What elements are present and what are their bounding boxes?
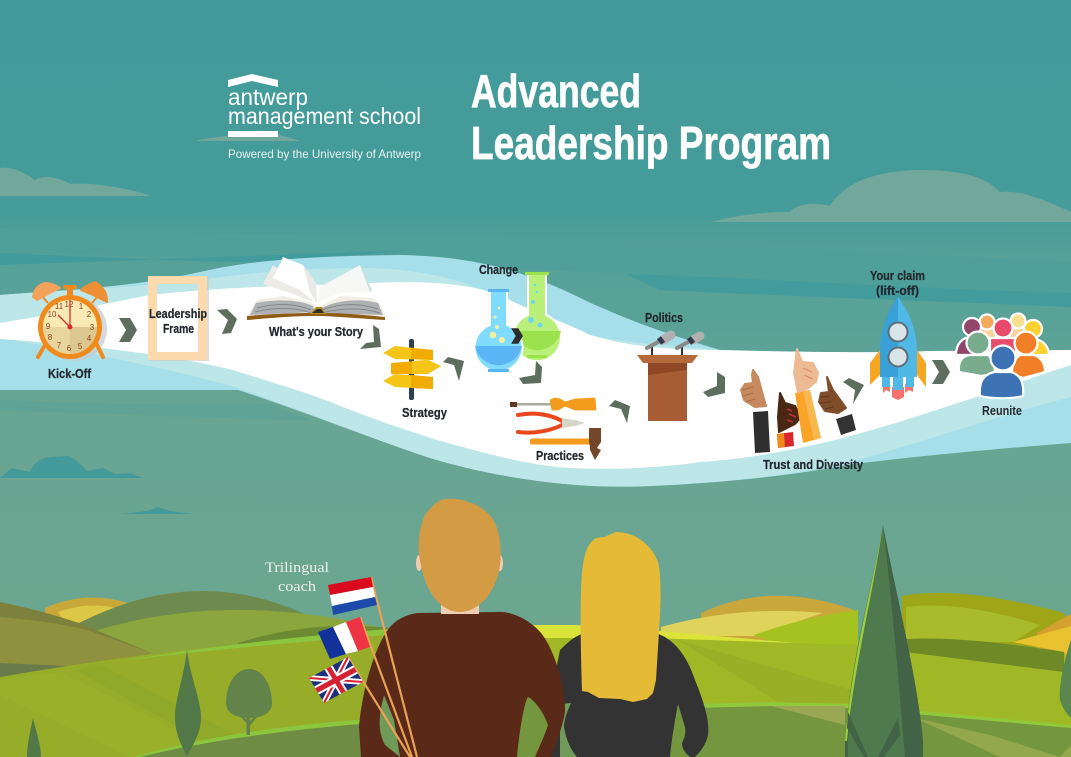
logo: Powered by the University of Antwerp bbox=[228, 147, 421, 161]
team icon: reunite: Reunite bbox=[982, 403, 1022, 418]
alarm clock kick-off: 4 bbox=[87, 334, 92, 343]
hands: trust and diversity: Trust and Diversity bbox=[763, 457, 864, 472]
sky wave bands bbox=[0, 228, 1071, 420]
alarm clock kick-off: 7 bbox=[57, 341, 62, 350]
alarm clock kick-off: 11 bbox=[55, 302, 64, 311]
man viewed from behind bbox=[359, 499, 565, 757]
tools: practices bbox=[510, 398, 601, 463]
leadership frame: Leadership bbox=[149, 306, 207, 321]
title: Leadership Program bbox=[471, 117, 831, 169]
flag: united kingdom bbox=[309, 657, 363, 703]
caption: trilingual coach: coach bbox=[278, 579, 317, 595]
cypress tree large right bbox=[845, 525, 923, 757]
alarm clock kick-off: 5 bbox=[78, 342, 83, 351]
hands: trust and diversity bbox=[741, 349, 864, 472]
alarm clock kick-off: 8 bbox=[48, 333, 53, 342]
signpost: strategy: Strategy bbox=[402, 405, 448, 420]
leadership frame bbox=[148, 276, 209, 361]
rocket: your claim bbox=[870, 268, 926, 400]
rocket: your claim: Your claim bbox=[870, 268, 925, 283]
leadership frame: Frame bbox=[163, 321, 194, 336]
title bbox=[471, 65, 831, 169]
tools: practices: Practices bbox=[536, 448, 584, 463]
flag: france bbox=[318, 617, 370, 659]
landscape hills bbox=[0, 591, 1071, 757]
cypress tree far right edge bbox=[1060, 640, 1071, 718]
alarm clock kick-off: 3 bbox=[90, 323, 95, 332]
caption: trilingual coach bbox=[265, 560, 329, 595]
logo bbox=[228, 74, 421, 161]
flags bbox=[309, 577, 417, 757]
label: kick-off: Kick-Off bbox=[48, 366, 92, 381]
caption: trilingual coach: Trilingual bbox=[265, 560, 329, 576]
clouds bbox=[0, 131, 1071, 514]
logo: antwerp bbox=[228, 84, 308, 110]
alarm clock kick-off bbox=[33, 282, 107, 381]
cypress tree small left bbox=[27, 718, 41, 757]
alarm clock kick-off: 12 bbox=[65, 300, 74, 309]
title: Advanced bbox=[471, 65, 641, 117]
woman viewed from behind bbox=[550, 532, 708, 757]
podium: politics: Politics bbox=[645, 310, 683, 325]
flasks: change bbox=[474, 262, 561, 372]
team icon: reunite bbox=[956, 314, 1049, 418]
alarm clock kick-off: 10 bbox=[48, 310, 57, 319]
flag: netherlands bbox=[328, 577, 377, 615]
flasks: change: Change bbox=[479, 262, 518, 277]
book: what's your story bbox=[247, 257, 385, 339]
logo: management school bbox=[228, 103, 421, 129]
book: what's your story: What's your Story bbox=[269, 324, 364, 339]
flowing path ribbon bbox=[0, 255, 1071, 487]
alarm clock kick-off: 6 bbox=[67, 344, 72, 353]
alarm clock kick-off: 9 bbox=[46, 322, 51, 331]
cypress tree middle bbox=[175, 650, 201, 757]
rocket: your claim: (lift-off) bbox=[876, 283, 919, 298]
round tree bbox=[226, 669, 272, 735]
alarm clock kick-off: 1 bbox=[79, 302, 84, 311]
podium: politics bbox=[637, 310, 700, 421]
signpost: strategy bbox=[383, 339, 448, 420]
alarm clock kick-off: 2 bbox=[87, 310, 92, 319]
process chevrons bbox=[119, 309, 950, 423]
